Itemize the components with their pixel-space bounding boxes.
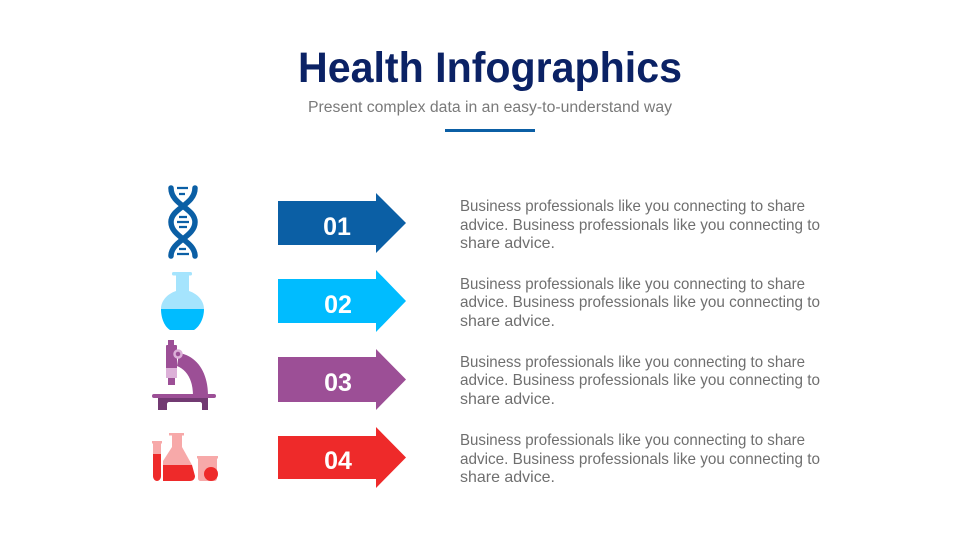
- text block 01: advice. Business professionals like you connecting to: [460, 217, 820, 234]
- arrow 04: [278, 427, 406, 488]
- arrow 02: [278, 270, 406, 332]
- icon: round flask: [161, 272, 204, 330]
- text block 04: advice. Business professionals like you connecting to: [460, 451, 820, 468]
- subtitle: Present complex data in an easy-to-understand way: [308, 99, 672, 116]
- text block 01: share advice.: [460, 235, 555, 252]
- text block 04: share advice.: [460, 469, 555, 486]
- icon: DNA helix: [171, 188, 195, 256]
- text block 02: [460, 276, 820, 330]
- arrow 03: [278, 349, 406, 410]
- title: Health Infographics: [298, 44, 682, 92]
- icon: microscope: [152, 340, 216, 410]
- text block 04: [460, 432, 820, 486]
- arrow 01: [278, 193, 406, 253]
- text block 02: Business professionals like you connecting to share: [460, 276, 805, 293]
- text block 02: share advice.: [460, 313, 555, 330]
- title underline: [445, 129, 535, 132]
- arrow 02: 02: [324, 291, 352, 319]
- text block 01: [460, 198, 820, 252]
- text block 03: [460, 354, 820, 408]
- text block 04: Business professionals like you connecting to share: [460, 432, 805, 449]
- text block 03: share advice.: [460, 391, 555, 408]
- text block 01: Business professionals like you connecting to share: [460, 198, 805, 215]
- arrow 01: 01: [323, 213, 351, 241]
- text block 03: Business professionals like you connecting to share: [460, 354, 805, 371]
- text block 03: advice. Business professionals like you connecting to: [460, 372, 820, 389]
- arrow 04: 04: [324, 447, 352, 475]
- icon: lab glassware: [152, 433, 218, 481]
- text block 02: advice. Business professionals like you connecting to: [460, 294, 820, 311]
- arrow 03: 03: [324, 369, 352, 397]
